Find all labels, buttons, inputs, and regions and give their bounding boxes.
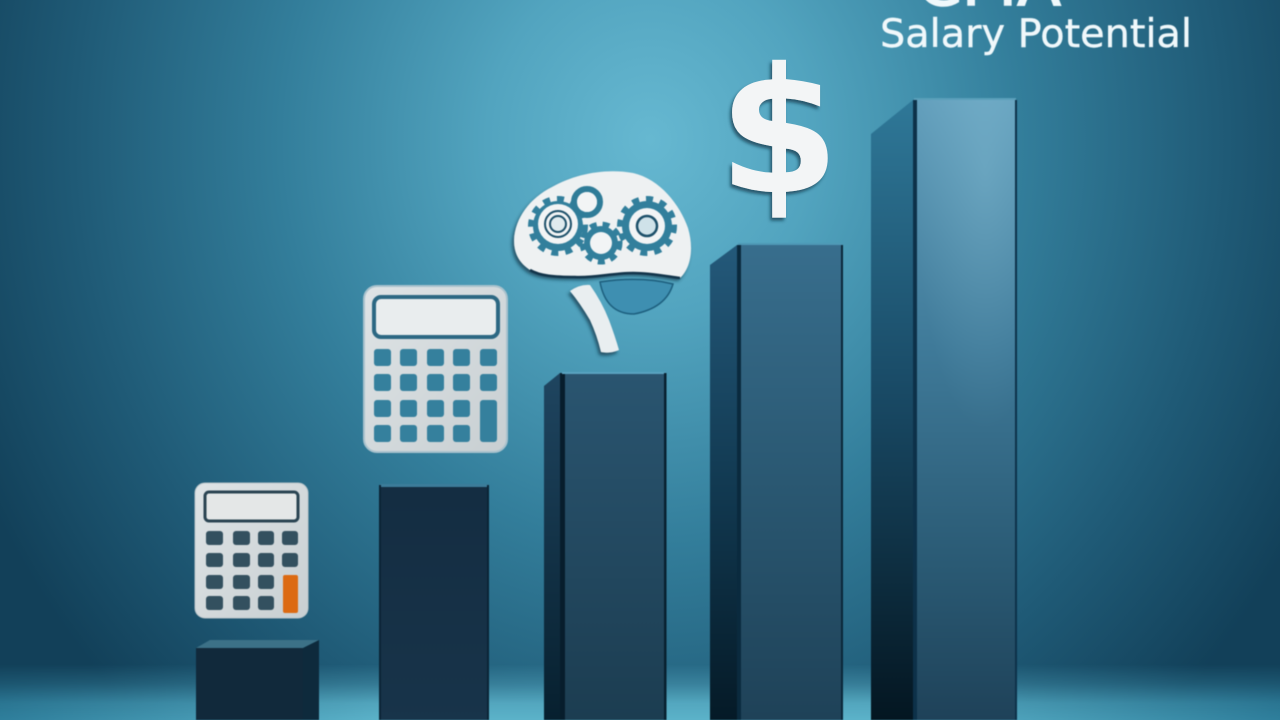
gear: right (620, 199, 674, 253)
icon: small calculator (195, 483, 308, 618)
bar 1 (196, 640, 319, 720)
gear: bottom middle (582, 224, 620, 262)
title line: Salary Potential: Salary Potential (880, 12, 1192, 57)
title (880, 0, 1192, 57)
bar 4 (710, 243, 843, 720)
icon: dollar sign: $ (718, 31, 840, 234)
bar 2 (379, 484, 489, 720)
floor glow (0, 670, 1280, 720)
icon: brain with gears (514, 171, 691, 353)
bar 5 (871, 98, 1017, 720)
gear: left (531, 199, 585, 253)
gear: top middle (574, 189, 600, 215)
bar 3 (544, 372, 666, 720)
icon: large calculator (364, 286, 507, 452)
